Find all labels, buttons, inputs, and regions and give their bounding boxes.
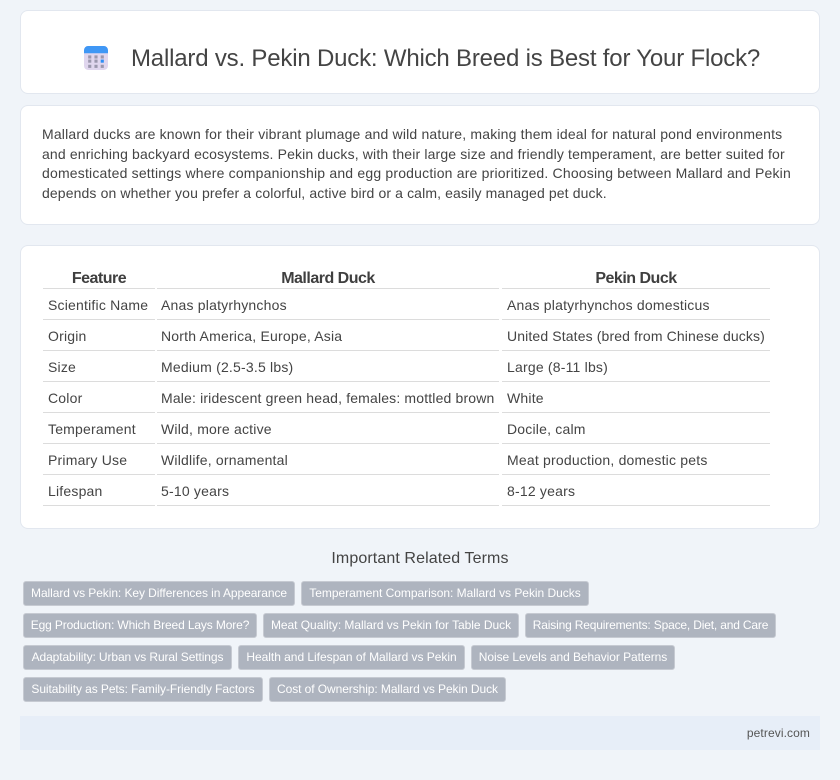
tag: Health and Lifespan of Mallard vs Pekin — [246, 650, 457, 664]
tag: Raising Requirements: Space, Diet, and Care — [533, 618, 768, 632]
header panel — [20, 10, 820, 94]
row: lifespan: Lifespan — [48, 483, 103, 499]
tag — [301, 581, 589, 606]
row: origin: Origin — [48, 328, 87, 344]
intro text: and enriching backyard ecosystems. Pekin ducks, with their large size and friendly temperament, are better suited for — [42, 146, 785, 162]
intro text: domesticated settings where companionship and egg production are prioritized. Choosing between Mallard and Pekin — [42, 165, 791, 181]
intro text: depends on whether you prefer a colorful, active bird or a calm, easily managed pet duck. — [42, 185, 607, 201]
row: primary use: Meat production, domestic pets — [507, 452, 708, 468]
row: origin: United States (bred from Chinese ducks) — [507, 328, 765, 344]
tag — [238, 645, 465, 670]
tag: Adaptability: Urban vs Rural Settings — [32, 650, 223, 664]
row: scientific name — [48, 297, 710, 313]
tag — [23, 677, 263, 702]
row: color: Color — [48, 390, 82, 406]
tag — [23, 613, 257, 638]
row: scientific name: Scientific Name — [48, 297, 148, 313]
row: temperament: Temperament — [48, 421, 136, 437]
row: color: Male: iridescent green head, females: mottled brown — [161, 390, 494, 406]
row: temperament — [48, 421, 586, 437]
related terms heading: Important Related Terms — [331, 550, 509, 567]
row: lifespan: 8-12 years — [507, 483, 575, 499]
tag: Egg Production: Which Breed Lays More? — [31, 618, 249, 632]
comparison table panel — [20, 245, 820, 529]
row: size: Large (8-11 lbs) — [507, 359, 608, 375]
row: primary use: Primary Use — [48, 452, 127, 468]
row: temperament: Docile, calm — [507, 421, 586, 437]
tag: Suitability as Pets: Family-Friendly Factors — [31, 682, 255, 696]
intro panel — [20, 105, 820, 225]
row: size: Medium (2.5-3.5 lbs) — [161, 359, 293, 375]
tag — [525, 613, 776, 638]
row: color: White — [507, 390, 544, 406]
tag — [471, 645, 675, 670]
row: lifespan: 5-10 years — [161, 483, 229, 499]
footer source: petrevi.com — [747, 726, 810, 740]
row: origin: North America, Europe, Asia — [161, 328, 342, 344]
tag — [269, 677, 506, 702]
row: primary use: Wildlife, ornamental — [161, 452, 288, 468]
tag — [263, 613, 519, 638]
tag — [23, 581, 295, 606]
icon: calendar — [84, 46, 108, 70]
tag: Meat Quality: Mallard vs Pekin for Table Duck — [271, 618, 511, 632]
table header: pekin: Pekin Duck — [595, 270, 677, 287]
row: size — [48, 359, 608, 375]
intro text: Mallard ducks are known for their vibrant plumage and wild nature, making them ideal for natural pond environments — [42, 126, 782, 142]
intro text — [42, 126, 791, 201]
row: scientific name: Anas platyrhynchos — [161, 297, 287, 313]
row: temperament: Wild, more active — [161, 421, 272, 437]
row: color — [48, 390, 544, 406]
tag: Mallard vs Pekin: Key Differences in Appearance — [31, 586, 287, 600]
table header: feature: Feature — [72, 270, 126, 287]
row: primary use — [48, 452, 708, 468]
row: lifespan — [48, 483, 575, 499]
title: Mallard vs. Pekin Duck: Which Breed is Best for Your Flock? — [131, 45, 760, 72]
tag — [23, 645, 232, 670]
row: origin — [48, 328, 765, 344]
table header: mallard: Mallard Duck — [281, 270, 375, 287]
row: scientific name: Anas platyrhynchos domesticus — [507, 297, 710, 313]
tag: Noise Levels and Behavior Patterns — [479, 650, 667, 664]
footer bar — [20, 716, 820, 750]
row: size: Size — [48, 359, 76, 375]
tag: Cost of Ownership: Mallard vs Pekin Duck — [277, 682, 498, 696]
tag: Temperament Comparison: Mallard vs Pekin Ducks — [309, 586, 581, 600]
related term tags — [23, 581, 776, 702]
